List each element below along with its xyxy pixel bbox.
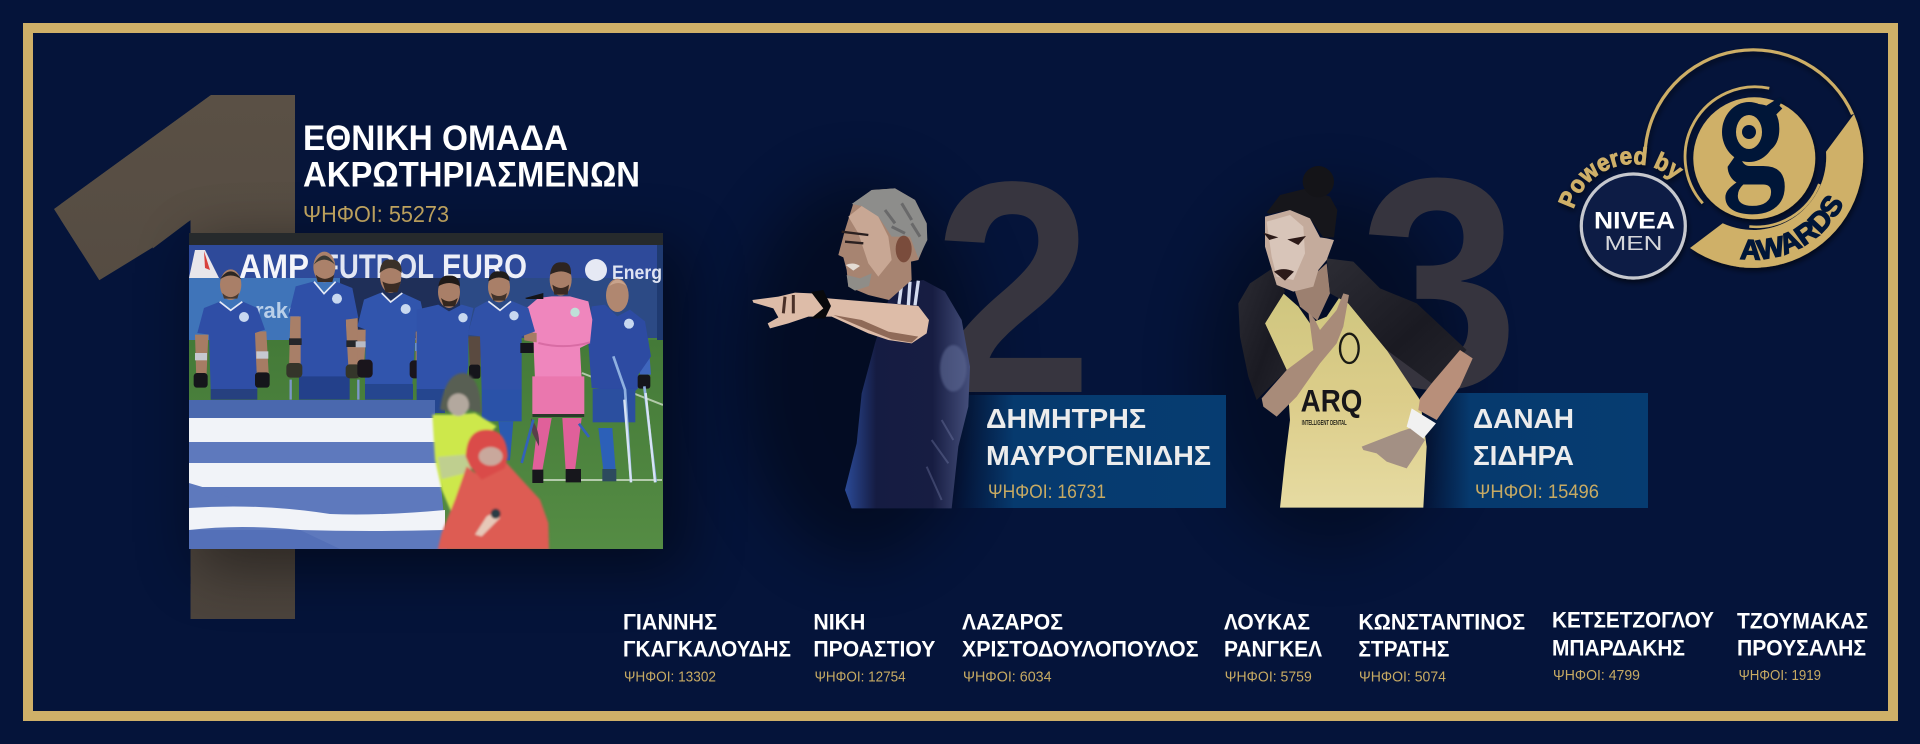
logo: nivea men: MEN: [1604, 232, 1662, 255]
banner: rako: [255, 298, 301, 323]
logo: gd awards: [1644, 36, 1866, 273]
hair: [1267, 188, 1337, 237]
forehead light: [848, 203, 892, 277]
torso folds: [927, 420, 953, 500]
banner: FUTBOL: [322, 248, 434, 286]
panel: third place name: ΔΑΝΑΗ: [1473, 403, 1574, 434]
runner-up shadow: [740, 180, 980, 560]
number 3: 3: [1359, 115, 1519, 451]
mouth and eyes: [846, 264, 860, 271]
right sleeve: [1327, 258, 1467, 383]
player 3: [356, 259, 428, 400]
players left group: [194, 252, 428, 400]
banner: Energ: [612, 263, 662, 284]
nominee: lazaros christodoulopoulos: [962, 609, 1198, 686]
banner: EURO: [442, 248, 527, 286]
panel: third place name: ΣΙΔΗΡΑ: [1473, 440, 1574, 471]
powered by text: Powered by: [1558, 146, 1686, 212]
bun: [1303, 166, 1334, 197]
player 1: [194, 269, 270, 400]
nominee: loukas rangkel: ΡΑΝΓΚΕΛ: [1224, 637, 1322, 662]
shirt: [1265, 293, 1427, 508]
nominee: giannis gkagkaloudis: ΓΙΑΝΝΗΣ: [623, 609, 717, 634]
hair: [852, 188, 927, 258]
panel: third place name: [1420, 393, 1648, 508]
logo: nivea men: NIVEA: [1594, 208, 1675, 234]
nominee: lazaros christodoulopoulos: ΛΑΖΑΡΟΣ: [962, 609, 1063, 634]
third place shadow: [1200, 190, 1460, 550]
shirt stripes: [899, 281, 918, 305]
nominee: niki proastiou: ΨΗΦΟΙ: 12754: [815, 669, 906, 686]
g bowl: [1722, 102, 1776, 162]
outer ring: [1645, 50, 1852, 148]
nominee: konstantinos stratis: ΨΗΦΟΙ: 5074: [1359, 669, 1446, 686]
winner votes: ΨΗΦΟΙ: 55273: [303, 201, 449, 227]
shirt sponsor: INTELLIGENT DENTAL: [1302, 418, 1347, 427]
left sleeve: [1238, 267, 1287, 400]
head: [838, 188, 927, 300]
letter g: g: [1722, 36, 1786, 215]
nominee: tzoumakas prousalis: ΠΡΟΥΣΑΛΗΣ: [1737, 636, 1866, 661]
goalkeeper: [522, 262, 592, 483]
nominee: konstantinos stratis: ΚΩΝΣΤΑΝΤΙΝΟΣ: [1358, 609, 1525, 634]
grass: [189, 340, 663, 549]
banner: AMP: [239, 248, 309, 286]
nominee: tzoumakas prousalis: [1737, 608, 1868, 684]
player 4: [417, 276, 473, 413]
nominee: konstantinos stratis: [1358, 609, 1525, 686]
nominee: loukas rangkel: ΨΗΦΟΙ: 5759: [1225, 669, 1312, 686]
nominee: tzoumakas prousalis: ΨΗΦΟΙ: 1919: [1739, 667, 1821, 684]
players right group: [417, 262, 656, 483]
right arm: [1418, 350, 1473, 420]
nominee: loukas rangkel: [1224, 609, 1322, 686]
winner title: ΑΚΡΩΤΗΡΙΑΣΜΕΝΩΝ: [303, 156, 640, 194]
awards text: AWARDS: [1740, 196, 1842, 260]
nominee: ketsetzoglou bardakis: [1552, 608, 1714, 684]
wristband: [1407, 408, 1436, 438]
nominee: konstantinos stratis: ΣΤΡΑΤΗΣ: [1358, 637, 1449, 662]
nominee: lazaros christodoulopoulos: ΨΗΦΟΙ: 6034: [963, 669, 1052, 686]
nominee: giannis gkagkaloudis: [623, 609, 791, 686]
watch: [811, 290, 831, 318]
panel: second place name: ΜΑΥΡΟΓΕΝΙΔΗΣ: [986, 440, 1211, 471]
neck: [1295, 263, 1330, 321]
stadium strip: [189, 233, 663, 245]
panel: third place name: ΨΗΦΟΙ: 15496: [1475, 482, 1599, 503]
badge: [1340, 334, 1359, 363]
crescent: [1690, 114, 1863, 268]
winner title: [303, 119, 640, 194]
nominee: tzoumakas prousalis: ΤΖΟΥΜΑΚΑΣ: [1737, 608, 1868, 634]
player 7: [588, 279, 656, 482]
lower inner arc: [1749, 184, 1819, 227]
ear: [896, 236, 912, 262]
pointing arm: [752, 293, 929, 343]
inner arc: [1685, 87, 1769, 203]
crossing arm: [1262, 293, 1349, 417]
number 2: 2: [933, 119, 1093, 456]
nominee: ketsetzoglou bardakis: ΜΠΑΡΔΑΚΗΣ: [1552, 636, 1685, 661]
panel: second place name: ΨΗΦΟΙ: 16731: [988, 482, 1106, 503]
nominee: lazaros christodoulopoulos: ΧΡΙΣΤΟΔΟΥΛΟΠΟΥΛΟΣ: [962, 637, 1198, 662]
man pointing figure: [752, 188, 970, 508]
nominee: niki proastiou: ΠΡΟΑΣΤΙΟΥ: [813, 637, 936, 662]
hand on hip: [1362, 428, 1425, 468]
face: [1265, 210, 1334, 292]
knuckles: [783, 295, 793, 313]
panel: second place name: [954, 395, 1226, 508]
winner title: ΕΘΝΙΚΗ ΟΜΑΔΑ: [303, 119, 568, 158]
torso: [845, 280, 970, 508]
greek flag: [189, 400, 447, 549]
nominee: loukas rangkel: ΛΟΥΚΑΣ: [1224, 609, 1310, 634]
banner: [189, 245, 663, 343]
volunteers: [432, 373, 549, 550]
logo: nivea men: [1581, 174, 1685, 278]
nominee: giannis gkagkaloudis: ΨΗΦΟΙ: 13302: [624, 669, 716, 686]
letters ID: ID: [1746, 181, 1770, 203]
volunteer in yellow: [432, 373, 497, 513]
nominee: ketsetzoglou bardakis: ΨΗΦΟΙ: 4799: [1553, 667, 1640, 684]
player 2: [286, 252, 360, 400]
volunteer in red: [438, 430, 549, 550]
arm shadow: [833, 315, 918, 343]
panel: second place name: ΔΗΜΗΤΡΗΣ: [986, 403, 1146, 434]
shoulder highlight: [940, 345, 967, 392]
face light: [1267, 215, 1305, 280]
nominee: niki proastiou: ΝΙΚΗ: [813, 609, 865, 634]
gold disc: [1693, 97, 1815, 219]
g ear: [1767, 101, 1782, 116]
nominee: giannis gkagkaloudis: ΓΚΑΓΚΑΛΟΥΔΗΣ: [623, 637, 791, 662]
woman figure: [1238, 166, 1473, 508]
beard: [847, 273, 872, 291]
player 5: [468, 271, 537, 460]
photo shadow: [195, 245, 685, 570]
nominee: ketsetzoglou bardakis: ΚΕΤΣΕΤΖΟΓΛΟΥ: [1552, 608, 1714, 633]
nominee: niki proastiou: [813, 609, 936, 686]
shirt logo: ARQ: [1301, 383, 1362, 419]
hair texture: [885, 203, 920, 237]
team photo: [189, 233, 663, 550]
eyes and mouth: [1263, 233, 1306, 281]
